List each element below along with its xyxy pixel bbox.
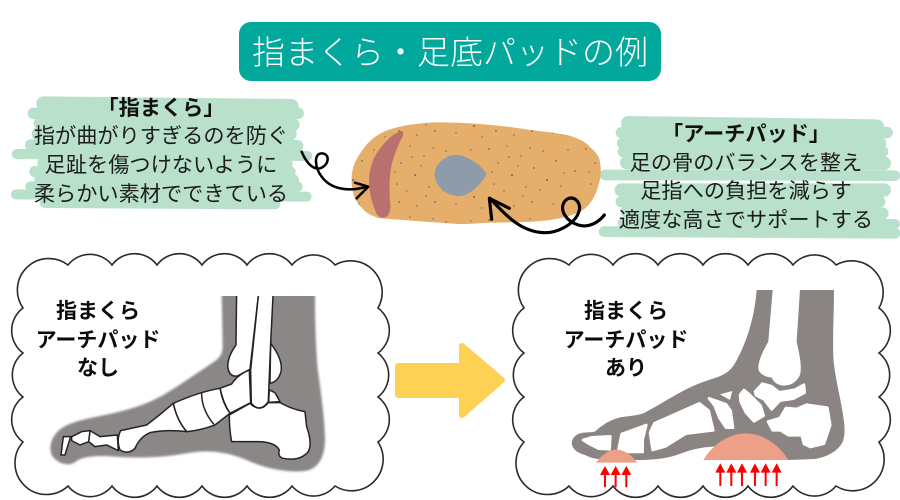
label: with: 指まくら (584, 300, 668, 323)
title banner (239, 22, 661, 81)
label: none: 指まくら (56, 300, 140, 323)
insole illustration (352, 122, 601, 224)
label: with (564, 300, 688, 380)
tibia (228, 290, 259, 376)
scalloped frame (513, 254, 890, 497)
arch pad (435, 155, 487, 196)
talus (755, 384, 805, 409)
toe bones (89, 431, 118, 451)
panel: toe pillow callout (16, 96, 307, 206)
arrow: curly to toe pillow (302, 152, 368, 198)
navicular (740, 390, 764, 421)
cuneiform (709, 398, 733, 428)
arch pad (703, 433, 788, 460)
callout text: 適度な高さでサポートする (619, 208, 873, 232)
tibia (758, 290, 801, 386)
insole speckles (352, 122, 601, 224)
heel bone (768, 405, 830, 447)
panel: with pads (513, 254, 890, 497)
scalloped frame (12, 254, 389, 497)
small tarsal (269, 390, 280, 402)
callout text: 足の骨のバランスを整え (630, 151, 862, 175)
callout text: 「アーチパッド」 (662, 122, 830, 146)
arrow: curly to arch pad (489, 198, 604, 233)
red pressure arrows: toes (600, 466, 631, 487)
heel bone (229, 403, 310, 459)
tarsal bones (173, 388, 230, 432)
panel: without pads (12, 254, 389, 497)
label: none: なし (77, 357, 119, 380)
label: none (36, 300, 160, 380)
foot x-ray, no support (50, 290, 325, 471)
foot silhouette (572, 290, 845, 460)
metatarsal (650, 403, 713, 450)
proximal phalanx (618, 425, 646, 452)
callout text: 「指まくら」 (97, 96, 225, 120)
callout text: 指が曲がりすぎるのを防ぐ (34, 124, 288, 148)
title banner: 指まくら・足底パッドの例 (252, 34, 648, 71)
green brush background (16, 103, 307, 204)
callout text (619, 122, 873, 232)
label: with: あり (605, 357, 647, 380)
small tarsal (720, 391, 732, 400)
callout text: 柔らかい素材でできている (34, 182, 288, 206)
callout text (34, 96, 288, 206)
talus (220, 370, 251, 413)
rear ankle bone (270, 343, 281, 383)
toe bone (583, 436, 610, 449)
arrow: before to after (398, 346, 502, 415)
foot x-ray, supported (572, 290, 845, 487)
callout text: 足趾を傷つけないように (45, 153, 277, 177)
label: none: アーチパッド (36, 329, 160, 352)
toe pad (596, 450, 637, 463)
callout text: 足指への負担を減らす (640, 179, 852, 203)
panel: arch pad callout (604, 122, 895, 233)
label: with: アーチパッド (564, 329, 688, 352)
fibula (251, 290, 273, 408)
insole body (352, 122, 601, 224)
red pressure arrows: arch (715, 463, 782, 486)
toe pillow pad (369, 131, 403, 218)
foot silhouette (50, 290, 325, 471)
green brush background (604, 123, 895, 233)
metatarsal (118, 403, 187, 452)
